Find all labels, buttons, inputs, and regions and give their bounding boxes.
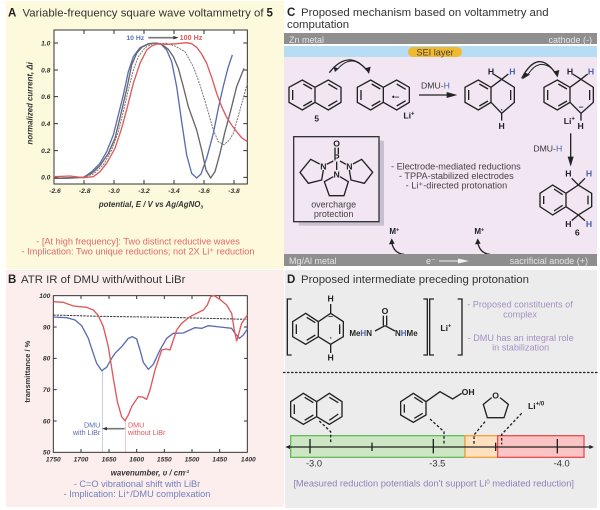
heading A: A xyxy=(8,8,16,20)
arrow: electron transfer 1 xyxy=(329,60,371,74)
product 6 xyxy=(540,168,592,238)
box: overcharge protection TPPA: N xyxy=(334,169,340,179)
heading A: 5 xyxy=(266,8,274,20)
line chart: voltammetry: 0.6 xyxy=(41,94,51,101)
cathode bar xyxy=(284,33,597,45)
DMU urea: MeHN xyxy=(349,329,372,338)
lilac reaction field xyxy=(284,57,597,254)
SEI layer: SEI layer xyxy=(416,48,454,58)
line chart: IR spectra: without LiBr xyxy=(127,429,166,437)
DMU urea: NHMe xyxy=(395,329,418,338)
radical anion: + xyxy=(411,111,415,117)
line chart: IR spectra: with LiBr xyxy=(72,429,101,437)
line chart: IR spectra: 1450 xyxy=(212,456,227,463)
arrow: DMU-H 2: DMU-H xyxy=(533,143,562,153)
caption A: - [At high frequency]: Two distinct reductive waves xyxy=(36,236,240,246)
line chart: voltammetry: -2.6 xyxy=(49,188,61,195)
box: overcharge protection TPPA: N xyxy=(320,161,326,171)
purple notes: - DMU has an integral role xyxy=(468,333,574,343)
heading B: B xyxy=(8,274,16,286)
anion intermediate: H xyxy=(567,67,573,77)
DMU urea xyxy=(349,306,418,338)
line chart: IR spectra: 60 xyxy=(43,418,51,425)
THF marker xyxy=(474,390,508,444)
heading C xyxy=(287,7,549,31)
caption A: - Implication: Two unique reductions; not 2X Li⁺ reduction xyxy=(22,246,254,256)
M+ release arrows: M xyxy=(474,227,481,236)
SEI layer xyxy=(284,46,597,58)
M+ release arrows: + xyxy=(396,228,399,234)
line chart: IR spectra: transmittance / % xyxy=(23,340,32,403)
radical intermediate: . xyxy=(500,103,503,113)
line chart: voltammetry: -3.4 xyxy=(168,188,180,195)
Li marker xyxy=(502,401,545,444)
line chart: IR spectra: 1550 xyxy=(157,456,172,463)
panel: A voltammetry xyxy=(6,1,284,269)
line chart: IR spectra: 1650 xyxy=(102,456,117,463)
panel: C mechanism xyxy=(284,7,597,266)
anion intermediate: H xyxy=(588,67,594,77)
line chart: voltammetry: 0.4 xyxy=(41,121,51,128)
heading B: ATR IR of DMU with/without LiBr xyxy=(21,274,186,286)
radical intermediate: H xyxy=(509,67,515,77)
Li marker: Li xyxy=(528,401,536,411)
radical intermediate: H xyxy=(499,121,505,131)
Li+: Li xyxy=(440,323,448,333)
number line with substrates xyxy=(285,387,594,489)
anode bar: Mg/Al metal xyxy=(289,256,337,266)
axis: -4.0 xyxy=(554,459,570,469)
box: overcharge protection TPPA xyxy=(294,137,384,226)
anion intermediate: + xyxy=(571,117,575,123)
anion intermediate: H xyxy=(578,121,584,131)
line chart: IR spectra: 90 xyxy=(43,324,51,331)
phenylethanol marker: OH xyxy=(462,387,475,397)
purple notes: complex xyxy=(503,309,537,319)
purple notes xyxy=(467,299,574,353)
heading C: computation xyxy=(287,19,349,31)
product 6: H xyxy=(586,219,592,229)
line chart: voltammetry: 0.2 xyxy=(41,148,51,155)
radical anion: •– xyxy=(392,92,400,101)
cathode bar: cathode (-) xyxy=(548,35,592,45)
bracketed note: [Measured reduction potentials don't support Li xyxy=(293,479,486,489)
box: overcharge protection TPPA: N xyxy=(346,161,352,171)
radical anion xyxy=(357,80,415,121)
line chart: IR spectra: 1600 xyxy=(129,456,144,463)
complex naphthalene: – xyxy=(328,311,333,321)
purple notes: - Proposed constituents of xyxy=(467,299,573,309)
M+ release arrows xyxy=(389,227,490,254)
line chart: voltammetry: normalized current, Δi xyxy=(25,61,34,144)
heading C: C xyxy=(287,7,295,19)
range bars xyxy=(291,436,584,457)
line chart: voltammetry: 0.8 xyxy=(41,67,51,74)
heading C: Proposed mechanism based on voltammetry and xyxy=(301,7,549,19)
box: overcharge protection TPPA: protection xyxy=(314,209,353,219)
axis xyxy=(285,439,594,469)
radical intermediate: H xyxy=(488,67,494,77)
line chart: IR spectra: wavenumber, υ / cm xyxy=(111,468,185,477)
summary text: - Li⁺-directed protonation xyxy=(406,181,507,191)
purple notes: in stabilization xyxy=(492,343,549,353)
radical anion: Li xyxy=(403,111,411,121)
DMU urea: O xyxy=(382,306,389,316)
axis: -3.0 xyxy=(306,459,322,469)
summary text xyxy=(391,161,521,191)
product 6: H xyxy=(565,219,571,229)
anion intermediate: Li xyxy=(564,116,571,126)
line chart: IR spectra: 50 xyxy=(43,450,51,457)
bracketed note: mediated reduction] xyxy=(490,479,574,489)
line chart: voltammetry: 0.0 xyxy=(41,175,51,182)
anode bar: e⁻ xyxy=(426,256,436,266)
line chart: voltammetry: 100 Hz xyxy=(180,34,203,42)
line chart: voltammetry: 10 Hz xyxy=(126,35,145,42)
heading D: Proposed intermediate preceding protonation xyxy=(301,274,529,286)
product 6: H xyxy=(586,168,592,178)
line chart: IR spectra: 1500 xyxy=(185,456,200,463)
line chart: IR spectra: 1750 xyxy=(46,456,61,463)
summary text: - TPPA-stabilized electrodes xyxy=(399,171,514,181)
molecule 5 naphthalene: 5 xyxy=(314,113,319,123)
heading A: Variable-frequency square wave voltammetry of xyxy=(22,8,264,20)
line chart: voltammetry: -3.2 xyxy=(138,188,150,195)
line chart: IR spectra xyxy=(23,293,256,477)
complex naphthalene: H xyxy=(328,353,334,363)
line chart: IR spectra: 100 xyxy=(39,293,51,300)
phenylethanol marker xyxy=(401,387,475,444)
box: overcharge protection TPPA: O xyxy=(333,139,340,149)
panel: D intermediate xyxy=(283,270,598,508)
heading D: D xyxy=(287,274,295,286)
caption A xyxy=(22,236,254,256)
Li+: + xyxy=(448,324,452,330)
summary text: - Electrode-mediated reductions xyxy=(391,161,521,171)
line chart: IR spectra: DMU xyxy=(128,422,144,430)
line chart: voltammetry: 3 xyxy=(200,205,203,211)
brackets xyxy=(287,299,462,355)
line chart: IR spectra: -1 xyxy=(185,469,190,474)
line chart: voltammetry xyxy=(25,30,247,211)
line chart: IR spectra: DMU xyxy=(84,422,100,430)
arrow: electron transfer 2 xyxy=(522,62,559,79)
naphthalene marker xyxy=(291,393,342,443)
complex naphthalene: H xyxy=(328,294,334,304)
line chart: IR spectra: 80 xyxy=(43,356,51,363)
M+ release arrows: M xyxy=(389,227,396,236)
line chart: voltammetry: potential, E / V vs Ag/AgNO xyxy=(99,200,200,209)
arrow: DMU-H 1: DMU-H xyxy=(421,81,450,91)
caption B: - C=O vibrational shift with LiBr xyxy=(74,479,200,489)
line chart: IR spectra: 1700 xyxy=(74,456,89,463)
product 6: H xyxy=(565,168,571,178)
line chart: voltammetry: -3.8 xyxy=(228,188,240,195)
molecule 5 naphthalene xyxy=(289,80,341,123)
bracketed note: 0 xyxy=(486,480,490,486)
line chart: voltammetry: -2.8 xyxy=(79,188,91,195)
THF marker: O xyxy=(492,390,499,400)
axis: -3.5 xyxy=(429,459,445,469)
line chart: IR spectra: 70 xyxy=(43,387,51,394)
caption B xyxy=(64,479,210,499)
panel: B ATR IR xyxy=(6,270,284,507)
caption B: - Implication: Li⁺/DMU complexation xyxy=(64,489,210,499)
anion intermediate: – xyxy=(579,101,584,111)
box: overcharge protection TPPA: P xyxy=(334,153,340,163)
anode bar xyxy=(284,254,597,266)
radical intermediate xyxy=(465,67,515,131)
line chart: voltammetry: 1.0 xyxy=(41,40,51,47)
line chart: IR spectra: 1400 xyxy=(241,456,256,463)
complex naphthalene xyxy=(293,294,343,363)
arrow: DMU-H 2 xyxy=(533,133,574,167)
arrow: DMU-H 1 xyxy=(419,81,457,98)
anion intermediate xyxy=(544,67,594,131)
box: overcharge protection TPPA: overcharge xyxy=(311,200,356,210)
anode bar: sacrificial anode (+) xyxy=(510,256,588,266)
product 6: 6 xyxy=(575,228,580,238)
complex naphthalene: . xyxy=(329,330,332,340)
cathode bar: Zn metal xyxy=(289,35,324,45)
line chart: voltammetry: -3.6 xyxy=(198,188,210,195)
line chart: voltammetry: -3.0 xyxy=(108,188,120,195)
Li marker: +/0 xyxy=(536,402,545,408)
M+ release arrows: + xyxy=(481,228,484,234)
